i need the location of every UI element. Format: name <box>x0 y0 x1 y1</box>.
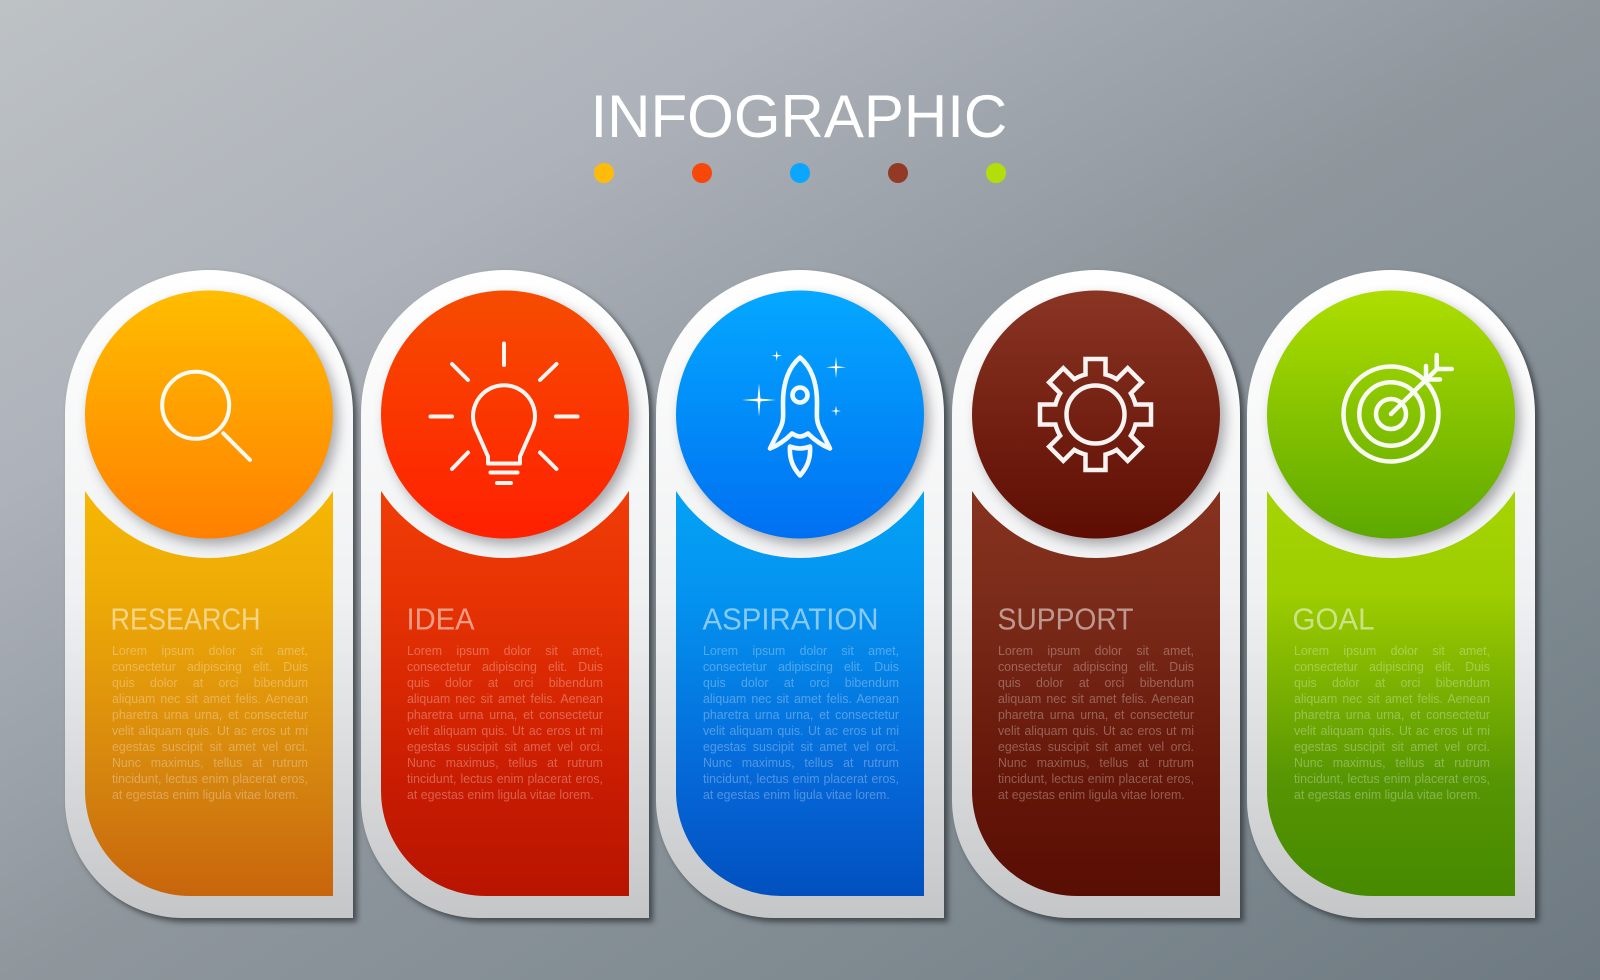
body text: pharetra urna urna, et consectetur <box>998 707 1194 722</box>
body text: Lorem ipsum dolor sit amet, <box>998 643 1194 658</box>
circle <box>380 290 628 538</box>
card backing <box>1247 270 1535 918</box>
body text: tincidunt, lectus enim placerat eros, <box>112 771 308 786</box>
body text: quis dolor at orci bibendum <box>407 675 603 690</box>
circle <box>676 290 924 538</box>
body text: at egestas enim ligula vitae lorem. <box>998 787 1185 802</box>
body text: egestas suscipit sit amet vel orci. <box>112 739 308 754</box>
colour panel <box>85 491 333 896</box>
body text: consectetur adipiscing elit. Duis <box>112 659 308 674</box>
body text: Nunc maximus, tellus at rutrum <box>112 755 308 770</box>
body text: consectetur adipiscing elit. Duis <box>407 659 603 674</box>
colour panel <box>676 491 924 896</box>
body text: Nunc maximus, tellus at rutrum <box>998 755 1194 770</box>
panel: goal <box>1247 270 1542 925</box>
body text: tincidunt, lectus enim placerat eros, <box>703 771 899 786</box>
heading: RESEARCH <box>110 602 260 636</box>
body text: tincidunt, lectus enim placerat eros, <box>1294 771 1490 786</box>
colour panel <box>380 491 628 896</box>
body text: quis dolor at orci bibendum <box>998 675 1194 690</box>
card backing <box>656 270 944 918</box>
body text: tincidunt, lectus enim placerat eros, <box>998 771 1194 786</box>
panel: idea <box>361 270 656 926</box>
body text: aliquam nec sit amet felis. Aenean <box>703 691 899 706</box>
body text: Nunc maximus, tellus at rutrum <box>703 755 899 770</box>
body text: Lorem ipsum dolor sit amet, <box>407 643 603 658</box>
body text: egestas suscipit sit amet vel orci. <box>407 739 603 754</box>
body text: pharetra urna urna, et consectetur <box>703 707 899 722</box>
body text: aliquam nec sit amet felis. Aenean <box>1294 691 1490 706</box>
body text <box>112 643 308 802</box>
card backing <box>65 270 353 918</box>
heading: IDEA <box>406 602 474 636</box>
body text: consectetur adipiscing elit. Duis <box>998 659 1194 674</box>
body text: Lorem ipsum dolor sit amet, <box>703 643 899 658</box>
body text: Nunc maximus, tellus at rutrum <box>1294 755 1490 770</box>
body text <box>703 643 899 802</box>
body text: aliquam nec sit amet felis. Aenean <box>407 691 603 706</box>
heading: GOAL <box>1292 602 1374 636</box>
body text: quis dolor at orci bibendum <box>703 675 899 690</box>
body text <box>407 643 603 802</box>
body text: quis dolor at orci bibendum <box>112 675 308 690</box>
body text: pharetra urna urna, et consectetur <box>1294 707 1490 722</box>
body text: pharetra urna urna, et consectetur <box>407 707 603 722</box>
body text: velit aliquam quis. Ut ac eros ut mi <box>998 723 1194 738</box>
icon: magnifier <box>162 372 250 460</box>
panel: aspiration <box>656 270 952 926</box>
circle <box>972 290 1220 538</box>
body text: consectetur adipiscing elit. Duis <box>703 659 899 674</box>
icon: rocket <box>742 350 846 476</box>
body text: egestas suscipit sit amet vel orci. <box>1294 739 1490 754</box>
icon: light bulb <box>430 344 577 483</box>
colour panel <box>972 491 1220 896</box>
body text: aliquam nec sit amet felis. Aenean <box>998 691 1194 706</box>
icon: gear <box>1040 359 1150 470</box>
body text: at egestas enim ligula vitae lorem. <box>1294 787 1480 802</box>
card backing <box>952 270 1240 918</box>
heading: SUPPORT <box>997 602 1133 636</box>
body text: aliquam nec sit amet felis. Aenean <box>112 691 308 706</box>
body text: velit aliquam quis. Ut ac eros ut mi <box>703 723 899 738</box>
body text: egestas suscipit sit amet vel orci. <box>998 739 1194 754</box>
circle <box>1267 290 1515 538</box>
body text: velit aliquam quis. Ut ac eros ut mi <box>407 723 603 738</box>
body text: at egestas enim ligula vitae lorem. <box>703 787 889 802</box>
body text: velit aliquam quis. Ut ac eros ut mi <box>1294 723 1490 738</box>
panel: support <box>952 270 1248 926</box>
body text: quis dolor at orci bibendum <box>1294 675 1490 690</box>
body text: Nunc maximus, tellus at rutrum <box>407 755 603 770</box>
body text: consectetur adipiscing elit. Duis <box>1294 659 1490 674</box>
body text: Lorem ipsum dolor sit amet, <box>112 643 308 658</box>
icon: target with arrow <box>1344 355 1452 462</box>
body text: velit aliquam quis. Ut ac eros ut mi <box>112 723 308 738</box>
body text: pharetra urna urna, et consectetur <box>112 707 308 722</box>
title: INFOGRAPHIC <box>590 83 1007 150</box>
body text: tincidunt, lectus enim placerat eros, <box>407 771 603 786</box>
circle <box>85 290 333 538</box>
body text <box>998 643 1194 802</box>
panel: research <box>65 270 361 926</box>
body text: egestas suscipit sit amet vel orci. <box>703 739 899 754</box>
body text: at egestas enim ligula vitae lorem. <box>407 787 594 802</box>
body text <box>1294 643 1490 802</box>
body text: Lorem ipsum dolor sit amet, <box>1294 643 1490 658</box>
heading: ASPIRATION <box>702 602 878 636</box>
body text: at egestas enim ligula vitae lorem. <box>112 787 298 802</box>
card backing <box>360 270 648 918</box>
colour panel <box>1267 491 1515 896</box>
coloured dots row <box>594 163 1006 183</box>
